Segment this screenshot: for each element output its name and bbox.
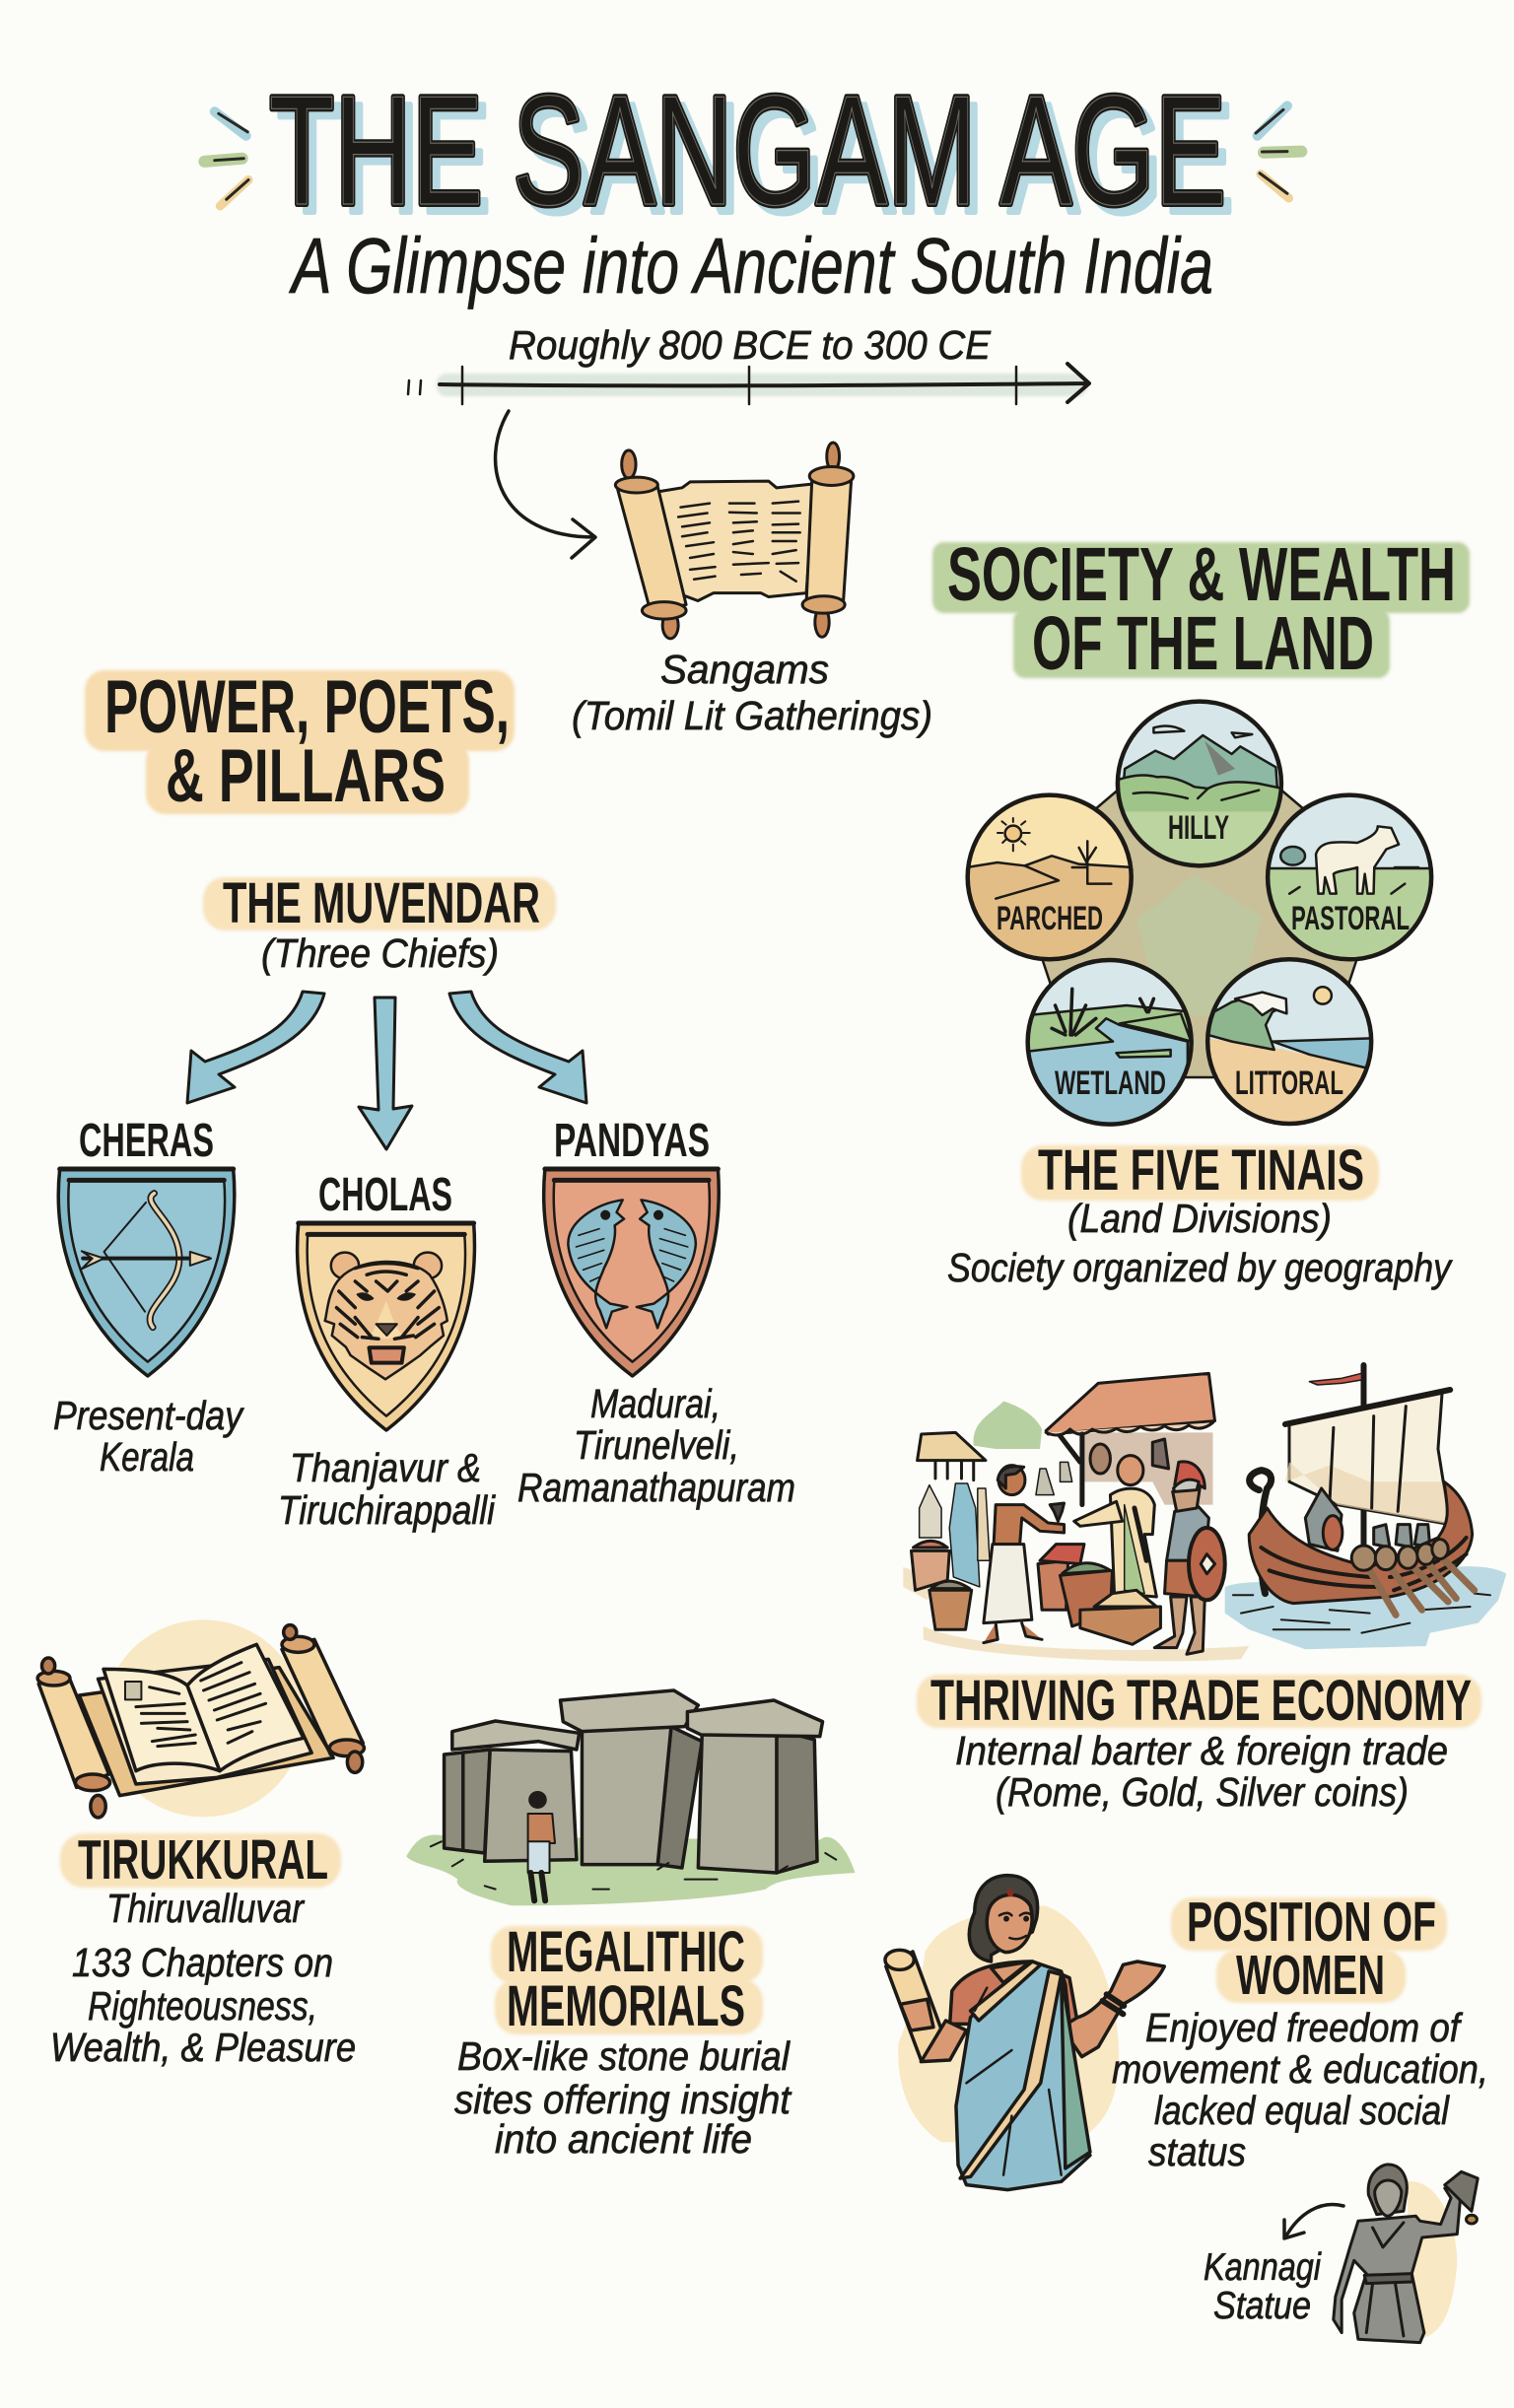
pandyas: Madurai, — [590, 1381, 721, 1426]
cholas: Thanjavur & — [290, 1445, 481, 1490]
timeline — [408, 322, 1089, 404]
icon: open book and scrolls — [37, 1619, 364, 1818]
icon: market scene — [903, 1373, 1249, 1661]
pandyas: PANDYAS — [554, 1115, 710, 1167]
statue label: Statue — [1213, 2285, 1311, 2327]
tinai labels: PARCHED — [997, 900, 1103, 937]
cholas: Tiruchirappalli — [278, 1487, 497, 1533]
tinai labels — [997, 809, 1410, 1102]
position of women text: lacked equal social — [1154, 2088, 1451, 2133]
section heading — [85, 665, 515, 818]
tirukkural text: Righteousness, — [88, 1983, 317, 2029]
timeline axis — [408, 364, 1089, 404]
trade text: (Rome, Gold, Silver coins) — [996, 1769, 1409, 1815]
panel: power poets pillars — [53, 665, 795, 1533]
five tinais diagram — [967, 700, 1434, 1126]
position of women text: Enjoyed freedom of — [1145, 2005, 1463, 2050]
cheras — [53, 1115, 244, 1479]
icon: woman with scroll — [885, 1876, 1164, 2190]
five tinais text: Society organized by geography — [947, 1245, 1453, 1290]
tirukkural text: 133 Chapters on — [72, 1940, 333, 1985]
position of women text — [1112, 1891, 1488, 2174]
tinai labels: PASTORAL — [1291, 900, 1410, 937]
megalithic text: Box-like stone burial — [457, 2033, 791, 2079]
pandyas: Ramanathapuram — [517, 1465, 795, 1510]
tinai labels: WETLAND — [1055, 1065, 1166, 1102]
icon: statue — [1334, 2165, 1478, 2343]
tirukkural text: Wealth, & Pleasure — [50, 2025, 356, 2070]
arrow to label — [1284, 2205, 1343, 2238]
panel: society and wealth — [885, 532, 1506, 2343]
muvendar heading: THE MUVENDAR — [223, 871, 540, 935]
cheras: CHERAS — [79, 1115, 214, 1167]
icon: bow shield — [58, 1169, 235, 1376]
tinai labels: HILLY — [1168, 809, 1229, 847]
muvendar heading: (Three Chiefs) — [261, 930, 499, 976]
position of women text: status — [1148, 2129, 1246, 2174]
section heading: & PILLARS — [166, 734, 446, 818]
panel: tirukkural — [37, 1619, 364, 2070]
pentagon backdrop — [1015, 721, 1384, 1077]
icon: sailing ship — [1225, 1365, 1506, 1649]
cholas — [278, 1169, 497, 1533]
pandyas: Tirunelveli, — [574, 1422, 739, 1468]
tirukkural text: Thiruvalluvar — [106, 1886, 306, 1931]
title block — [204, 64, 1301, 310]
tirukkural text — [50, 1828, 356, 2070]
icon: tiger shield — [298, 1223, 474, 1430]
pandyas — [517, 1115, 795, 1510]
sangams caption — [572, 647, 932, 738]
icon: stone dolmens with man — [406, 1690, 855, 1905]
megalithic text: MEMORIALS — [507, 1974, 745, 2038]
five tinais text: (Land Divisions) — [1067, 1196, 1332, 1241]
five tinais text — [947, 1138, 1453, 1290]
tinai labels: LITTORAL — [1235, 1065, 1343, 1102]
timeline label: Roughly 800 BCE to 300 CE — [509, 322, 992, 368]
statue label — [1204, 2246, 1322, 2327]
megalithic text: into ancient life — [495, 2116, 752, 2162]
tirukkural text: TIRUKKURAL — [78, 1828, 328, 1892]
panel: megalithic memorials — [406, 1690, 855, 2162]
statue label: Kannagi — [1204, 2246, 1322, 2289]
curved arrow to scroll — [496, 411, 595, 558]
section heading: POWER, POETS, — [104, 665, 510, 749]
arrows to chiefs — [187, 992, 586, 1149]
megalithic text: sites offering insight — [454, 2077, 792, 2122]
position of women text: WOMEN — [1236, 1944, 1385, 2007]
sangams caption: Sangams — [660, 647, 829, 692]
cholas: CHOLAS — [318, 1169, 452, 1221]
megalithic text: MEGALITHIC — [507, 1920, 745, 1984]
trade illustration — [903, 1365, 1506, 1661]
five tinais text: THE FIVE TINAIS — [1038, 1138, 1364, 1203]
tinai circles — [967, 700, 1434, 1126]
kannagi statue — [1204, 2165, 1478, 2343]
icon: scroll — [615, 443, 854, 639]
section heading — [932, 532, 1470, 686]
cheras: Present-day — [53, 1393, 244, 1438]
subtitle: A Glimpse into Ancient South India — [289, 222, 1213, 310]
sangams panel — [496, 411, 932, 738]
sangams caption: (Tomil Lit Gatherings) — [572, 693, 932, 738]
megalithic text — [454, 1920, 792, 2162]
icon: roman soldier — [1135, 1462, 1225, 1654]
icon: twin fish shield — [544, 1169, 719, 1376]
trade text: Internal barter & foreign trade — [955, 1728, 1448, 1773]
muvendar heading — [203, 871, 556, 976]
decorative title sparks — [204, 105, 1301, 206]
trade text — [917, 1669, 1481, 1815]
cheras: Kerala — [100, 1434, 194, 1479]
